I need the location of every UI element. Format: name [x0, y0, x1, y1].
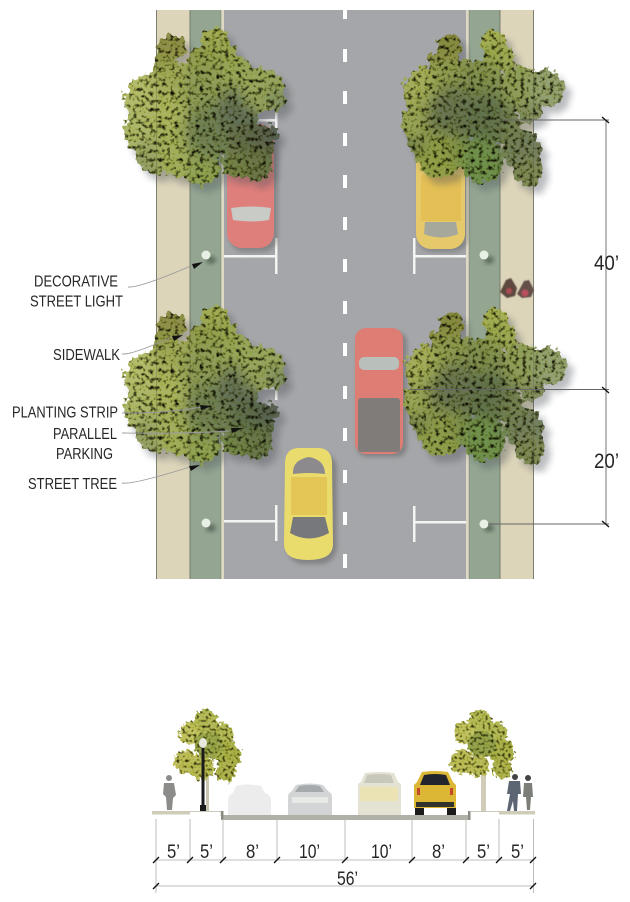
- 40 foot dimension: 40’: [594, 252, 619, 275]
- yellow car rear view: [414, 771, 456, 815]
- ghost yellow car 3: [358, 772, 401, 815]
- label: decorative street light: [30, 262, 203, 311]
- label: parallel parking: PARALLEL: [53, 426, 117, 443]
- width labels: 8’: [432, 841, 445, 863]
- tree canopy bottom left: [124, 305, 287, 464]
- plan dimensions: [410, 117, 619, 527]
- dimension lines and ticks: [153, 819, 536, 893]
- left section tree: [174, 710, 241, 812]
- street lamp: [199, 738, 207, 811]
- label: parallel parking: PARKING: [56, 446, 113, 463]
- left sidewalk: [156, 10, 190, 579]
- right pedestrians: [507, 774, 533, 811]
- roadway: [224, 10, 466, 579]
- label: sidewalk: [53, 335, 183, 364]
- label: street tree: [28, 465, 200, 493]
- width labels: 10’: [299, 841, 320, 863]
- curbs and edges: [156, 10, 534, 579]
- callout labels: [12, 262, 243, 493]
- moving red car: [355, 328, 407, 457]
- width labels: 10’: [371, 841, 392, 863]
- label: decorative street light: DECORATIVE: [34, 274, 118, 291]
- ghost car 2: [288, 784, 332, 815]
- left pedestrian: [163, 775, 176, 810]
- label: decorative street light: STREET LIGHT: [30, 294, 123, 311]
- ghost car 1: [228, 784, 271, 815]
- right sidewalk: [500, 10, 534, 579]
- plan view of street: [124, 10, 566, 579]
- tree canopy top right: [402, 30, 564, 186]
- street cross section: [152, 710, 536, 893]
- width labels: 5’: [167, 841, 180, 863]
- right section tree: [450, 710, 515, 812]
- pedestrians on sidewalk: [500, 278, 534, 298]
- parked yellow car: [416, 138, 468, 252]
- label: sidewalk: SIDEWALK: [53, 347, 120, 364]
- ground and curb profile: [152, 811, 535, 820]
- width labels: 5’: [200, 841, 213, 863]
- width labels: 5’: [511, 841, 524, 863]
- street lights: [202, 250, 494, 532]
- center line dashes: [343, 10, 347, 568]
- right planting strip: [469, 10, 500, 579]
- width labels: 56’: [337, 868, 358, 890]
- width labels: [167, 841, 524, 890]
- label: parallel parking: [53, 426, 243, 463]
- label: planting strip: [12, 405, 212, 422]
- width labels: 5’: [477, 841, 490, 863]
- parked red car: [227, 124, 278, 252]
- moving yellow car: [284, 448, 337, 564]
- 20 foot dimension: 20’: [594, 450, 619, 473]
- label: street tree: STREET TREE: [28, 476, 117, 493]
- width labels: 8’: [246, 841, 259, 863]
- label: planting strip: PLANTING STRIP: [12, 405, 118, 422]
- left planting strip: [190, 10, 221, 579]
- tree canopy bottom right: [404, 308, 566, 464]
- parking stall markings: [224, 112, 466, 542]
- tree canopy top left: [124, 27, 287, 186]
